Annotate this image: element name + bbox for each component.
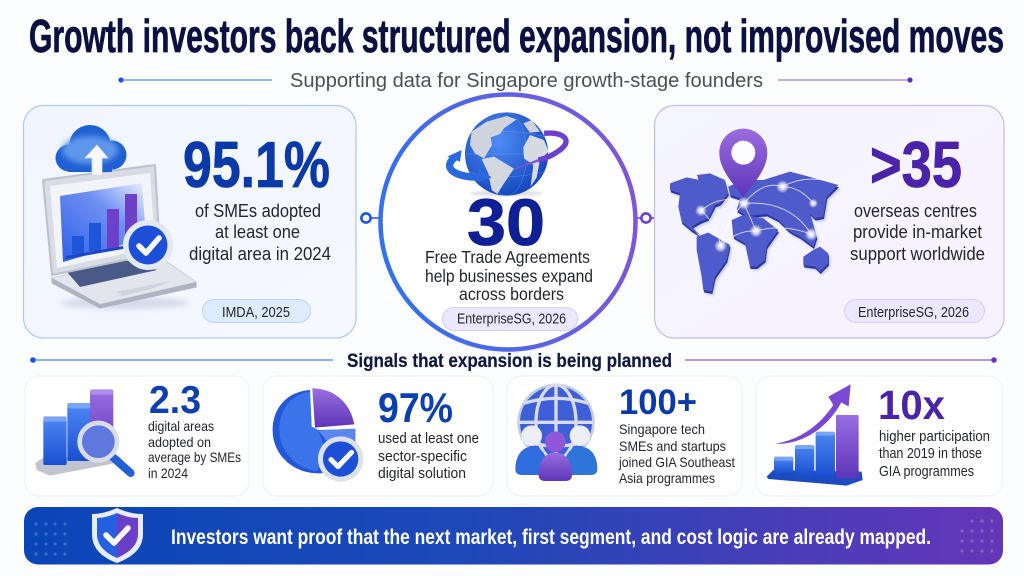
description: sector-specific (378, 449, 467, 465)
section heading: Signals that expansion is being planned (347, 351, 672, 372)
description: help businesses expand (425, 266, 593, 286)
icon: globe with three people (515, 385, 597, 481)
subtitle (118, 70, 913, 92)
description: at least one (215, 222, 300, 242)
stat: 95.1%: 95.1% (183, 128, 330, 201)
card: 10x participation (756, 376, 1002, 496)
card: 97% sector solution (263, 376, 493, 496)
icon: laptop with cloud upload and chart (43, 125, 196, 309)
description: average by SMEs (148, 449, 241, 465)
description: than 2019 in those (879, 446, 982, 462)
description: digital solution (378, 466, 466, 482)
description: Singapore tech (619, 421, 705, 437)
icon: pie chart with check (273, 388, 363, 482)
icon: bar chart with magnifier (35, 389, 131, 476)
stat: 10x: 10x (878, 382, 945, 428)
connector left (361, 213, 380, 223)
icon: world map with location pin (670, 129, 840, 296)
description (189, 201, 331, 264)
description: of SMEs adopted (195, 201, 321, 221)
description (879, 429, 990, 480)
description (850, 201, 985, 264)
description: GIA programmes (879, 464, 974, 480)
source pill (442, 308, 578, 330)
description: in 2024 (148, 465, 188, 481)
description: digital area in 2024 (189, 244, 331, 264)
section heading (30, 351, 997, 372)
stat: 30: 30 (467, 185, 545, 259)
stat: 100+: 100+ (619, 383, 697, 422)
description (425, 247, 593, 304)
description: SMEs and startups (619, 438, 726, 454)
panel: free trade agreements (380, 94, 636, 351)
card: 100+ GIA participants (507, 376, 742, 496)
description: across borders (459, 284, 564, 304)
subtitle: Supporting data for Singapore growth-stage founders (290, 70, 763, 92)
description: Free Trade Agreements (425, 247, 590, 267)
connector right (636, 213, 655, 223)
icon: shield with check (92, 508, 143, 563)
card: 2.3 digital areas (25, 376, 249, 496)
stat: 97%: 97% (378, 384, 453, 431)
description: higher participation (879, 429, 990, 445)
stat: 2.3: 2.3 (149, 379, 201, 422)
panel: overseas centres (654, 106, 1004, 338)
description: digital areas (148, 418, 214, 434)
description: used at least one (378, 431, 479, 447)
description: adopted on (148, 434, 211, 450)
banner (24, 507, 1003, 564)
description: Asia programmes (619, 470, 715, 486)
description: joined GIA Southeast (618, 454, 735, 470)
description (148, 418, 241, 481)
panel: digital adoption (24, 106, 356, 338)
source pill (844, 300, 984, 322)
icon: rising bars with arrow (767, 384, 863, 486)
source pill: EnterpriseSG, 2026 (858, 305, 969, 321)
description: support worldwide (850, 244, 985, 264)
description (378, 431, 479, 482)
description: overseas centres (854, 201, 977, 221)
source pill: EnterpriseSG, 2026 (457, 312, 566, 328)
stat: >35: >35 (870, 128, 962, 201)
description: provide in-market (853, 222, 982, 242)
description (618, 421, 735, 486)
source pill: IMDA, 2025 (222, 305, 290, 321)
icon: globe with arrows (447, 112, 566, 196)
source pill (202, 300, 310, 322)
